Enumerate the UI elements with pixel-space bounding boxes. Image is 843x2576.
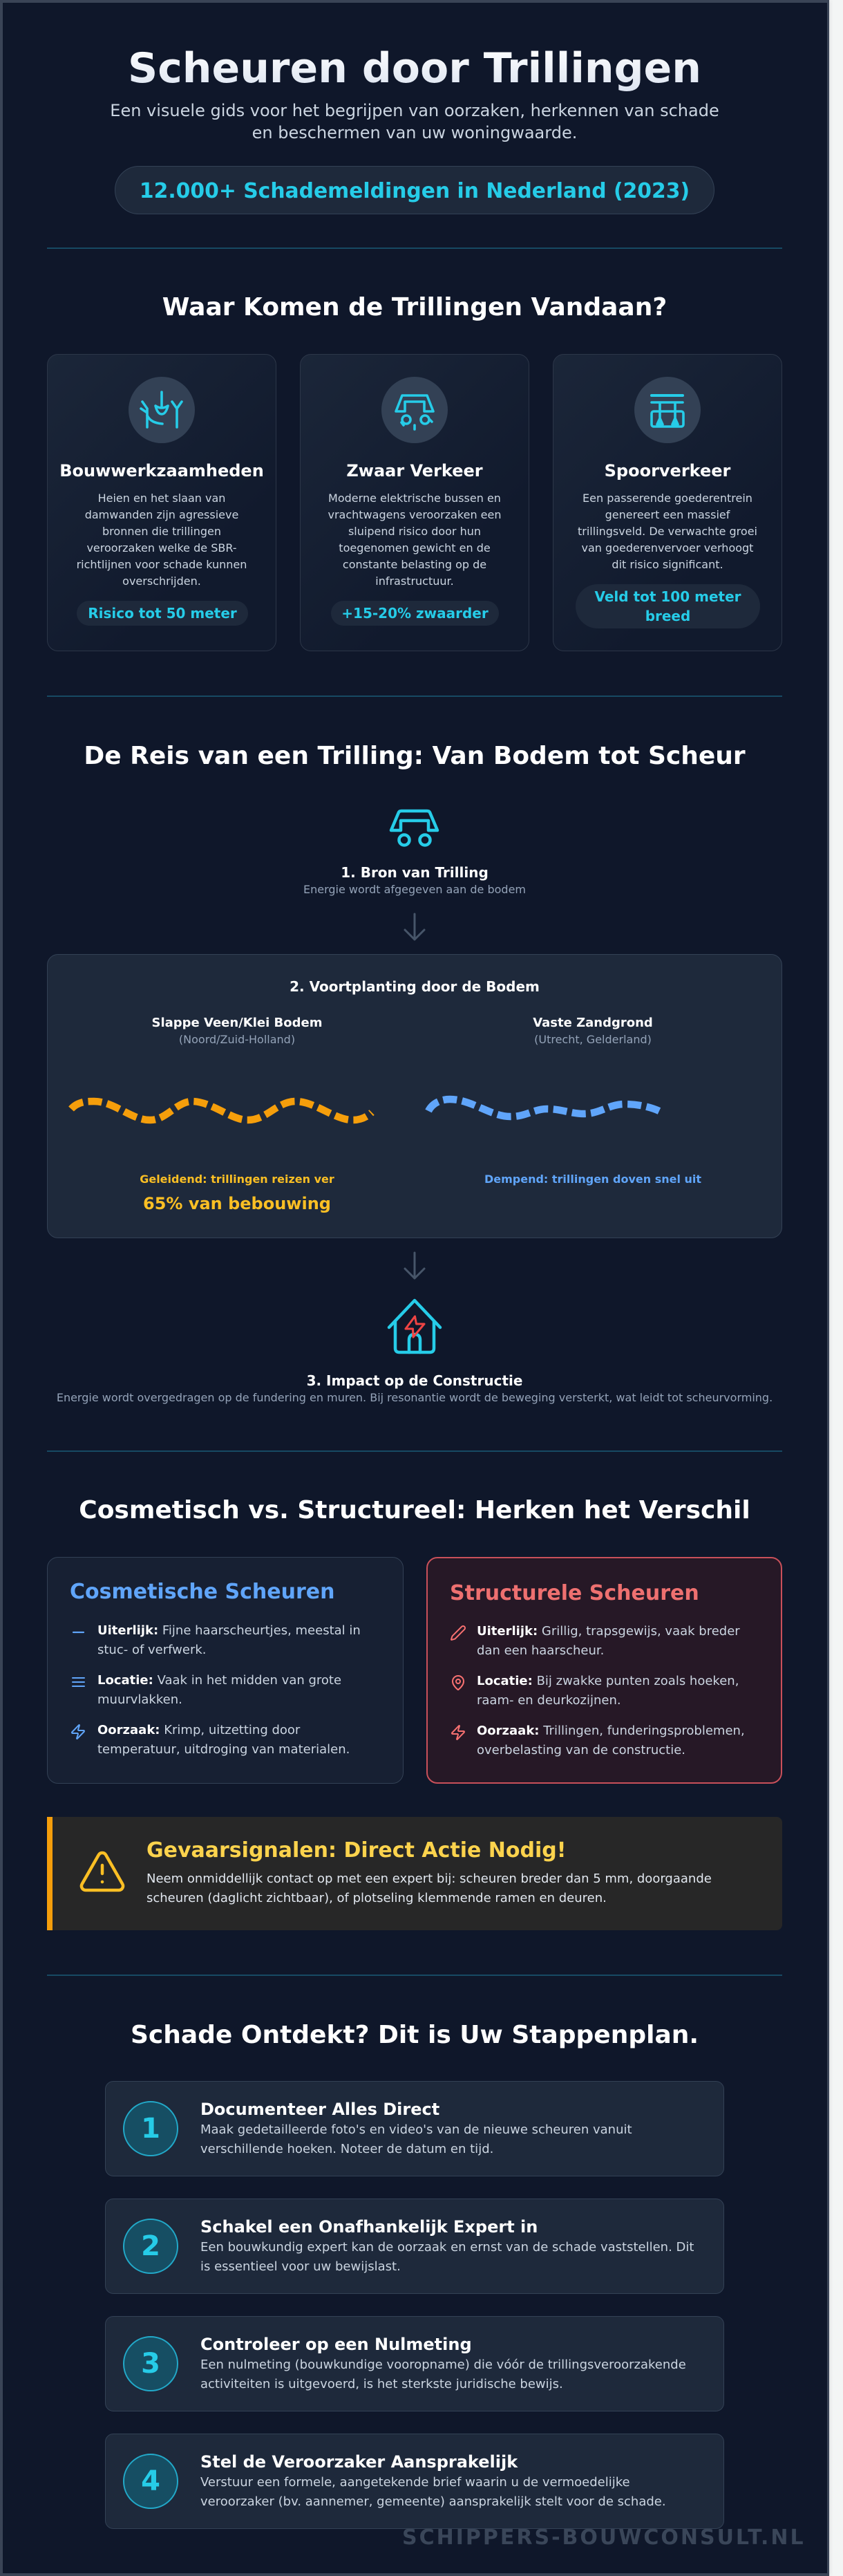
card text: veroorzaken welke de SBR- xyxy=(86,541,237,554)
step title: Schakel een Onafhankelijk Expert in xyxy=(200,2217,538,2237)
icon: warning triangle xyxy=(80,1851,124,1892)
card text: Moderne elektrische bussen en xyxy=(328,492,501,505)
item: appearance: Uiterlijk: Fijne haarscheurtjes, meestal in xyxy=(97,1623,361,1638)
subtitle: Een visuele gids voor het begrijpen van oorzaken, herkennen van schade xyxy=(110,101,719,120)
item: appearance: stuc- of verfwerk. xyxy=(97,1643,207,1657)
step title: Stel de Veroorzaker Aansprakelijk xyxy=(200,2452,518,2472)
step text: Een bouwkundig expert kan de oorzaak en ernst van de schade vaststellen. Dit xyxy=(200,2240,694,2255)
card text: damwanden zijn agressieve xyxy=(85,508,238,521)
panel heading: Structurele Scheuren xyxy=(450,1581,699,1605)
soil 2 name: Vaste Zandgrond xyxy=(533,1016,653,1030)
step text: verschillende hoeken. Noteer de datum en tijd. xyxy=(200,2142,493,2156)
badge xyxy=(331,601,499,626)
icon: truck source xyxy=(390,809,439,847)
step 1 text: Energie wordt afgegeven aan de bodem xyxy=(303,883,526,896)
icon: truck xyxy=(381,377,448,443)
card text: genereert een massief xyxy=(605,508,730,521)
heading: action plan: Schade Ontdekt? Dit is Uw Stappenplan. xyxy=(131,2021,699,2049)
step text: veroorzaker (bv. aannemer, gemeente) aansprakelijk stelt voor de schade. xyxy=(200,2494,666,2509)
badge xyxy=(77,601,248,626)
item: appearance xyxy=(97,1623,361,1657)
card text: infrastructuur. xyxy=(375,575,454,588)
panel: spoorverkeer xyxy=(553,354,782,651)
icon: dash xyxy=(72,1632,84,1633)
subtitle: en beschermen van uw woningwaarde. xyxy=(252,123,577,142)
badge: +15-20% zwaarder xyxy=(341,605,489,622)
item: location xyxy=(97,1673,341,1707)
step title: Documenteer Alles Direct xyxy=(200,2100,439,2119)
title: Scheuren door Trillingen xyxy=(128,44,701,93)
panel: propagation xyxy=(47,954,782,1238)
panel: cosmetic xyxy=(47,1557,404,1784)
card text: van goederenvervoer verhoogt xyxy=(582,541,753,554)
badge: Veld tot 100 meter xyxy=(594,588,741,605)
wave chart: soft soil xyxy=(68,1098,375,1124)
item: cause xyxy=(97,1723,350,1757)
item: cause: temperatuur, uitdroging van materialen. xyxy=(97,1742,350,1757)
callout text xyxy=(146,1872,712,1905)
number: 3 xyxy=(141,2348,160,2380)
conductive label: Geleidend: trillingen reizen ver xyxy=(140,1173,334,1186)
number: 4 xyxy=(141,2465,160,2497)
arrow xyxy=(404,913,426,940)
callout text: scheuren (daglicht zichtbaar), of plotseling klemmende ramen en deuren. xyxy=(146,1891,607,1905)
damping label: Dempend: trillingen doven snel uit xyxy=(484,1173,701,1186)
card text: overschrijden. xyxy=(122,575,201,588)
step 1 xyxy=(105,2081,724,2176)
card text: trillingsveld. De verwachte groei xyxy=(578,525,757,538)
icon: train xyxy=(634,377,701,443)
step 3 text: Energie wordt overgedragen op de fundering en muren. Bij resonantie wordt de beweging versterkt, wat leidt tot scheurvorming. xyxy=(57,1391,773,1404)
soil 1 region: (Noord/Zuid-Holland) xyxy=(179,1033,295,1046)
step text xyxy=(200,2475,666,2509)
card text: richtlijnen voor schade kunnen xyxy=(77,558,247,571)
card text: Heien en het slaan van xyxy=(98,492,225,505)
step text xyxy=(200,2358,686,2391)
step text: Maak gedetailleerde foto's en video's van de nieuwe scheuren vanuit xyxy=(200,2122,632,2137)
heading: journey: De Reis van een Trilling: Van Bodem tot Scheur xyxy=(84,742,746,770)
item: cause: overbelasting van de constructie. xyxy=(477,1743,685,1757)
card text xyxy=(578,492,757,571)
soil 2 region: (Utrecht, Gelderland) xyxy=(534,1033,652,1046)
heading: comparison: Cosmetisch vs. Structureel: Herken het Verschil xyxy=(79,1496,750,1524)
badge: breed xyxy=(645,608,690,624)
item: location: Locatie: Bij zwakke punten zoals hoeken, xyxy=(477,1674,739,1688)
wave chart: firm soil xyxy=(425,1095,661,1120)
icon: pile driver xyxy=(129,377,195,443)
card title: Bouwwerkzaamheden xyxy=(59,461,264,480)
icon: house with bolt xyxy=(387,1298,442,1354)
card text: bronnen die trillingen xyxy=(102,525,221,538)
item: location: Locatie: Vaak in het midden van grote xyxy=(97,1673,341,1688)
item: appearance xyxy=(477,1624,740,1658)
item: appearance: dan een haarscheur. xyxy=(477,1643,604,1658)
card text: vrachtwagens veroorzaken een xyxy=(328,508,502,521)
item: location: muurvlakken. xyxy=(97,1692,182,1707)
card text: Een passerende goederentrein xyxy=(582,492,752,505)
card text: sluipend risico door hun xyxy=(348,525,481,538)
callout text: Neem onmiddellijk contact op met een expert bij: scheuren breder dan 5 mm, doorgaande xyxy=(146,1872,712,1886)
icon: lines xyxy=(72,1677,85,1687)
step 2 xyxy=(105,2199,724,2294)
step text: is essentieel voor uw bewijslast. xyxy=(200,2259,401,2274)
heading: sources: Waar Komen de Trillingen Vandaan? xyxy=(162,293,667,321)
panel title: 2. Voortplanting door de Bodem xyxy=(290,978,540,995)
item: location: raam- en deurkozijnen. xyxy=(477,1693,621,1708)
step 4 xyxy=(105,2434,724,2529)
card title: Zwaar Verkeer xyxy=(346,461,483,480)
subtitle xyxy=(110,101,719,142)
icon: bolt xyxy=(70,1724,85,1739)
step text xyxy=(200,2122,632,2156)
badge xyxy=(576,584,760,628)
panel heading: Cosmetische Scheuren xyxy=(70,1580,334,1604)
stat pill: 12.000+ Schademeldingen in Nederland (2023) xyxy=(140,179,690,203)
badge: Risico tot 50 meter xyxy=(88,605,237,622)
step 3 title: 3. Impact op de Constructie xyxy=(307,1372,522,1389)
icon: pin xyxy=(452,1675,464,1690)
step 3 xyxy=(105,2316,724,2411)
card text: constante belasting op de xyxy=(343,558,486,571)
step text: activiteiten is uitgevoerd, is het sterkste juridische bewijs. xyxy=(200,2377,563,2391)
card text: dit risico significant. xyxy=(612,558,723,571)
number: 2 xyxy=(141,2230,160,2262)
step text xyxy=(200,2240,694,2274)
number xyxy=(123,2336,178,2391)
item: cause xyxy=(477,1724,745,1757)
number xyxy=(123,2101,178,2156)
step 1 title: 1. Bron van Trilling xyxy=(341,864,489,881)
callout heading: Gevaarsignalen: Direct Actie Nodig! xyxy=(146,1838,566,1863)
arrow xyxy=(404,1251,426,1279)
callout: danger signals xyxy=(47,1817,782,1930)
soil 1 name: Slappe Veen/Klei Bodem xyxy=(152,1016,322,1030)
step title: Controleer op een Nulmeting xyxy=(200,2335,472,2354)
title xyxy=(0,44,829,93)
number xyxy=(123,2219,178,2274)
step text: Verstuur een formele, aangetekende brief waarin u de vermoedelijke xyxy=(200,2475,630,2490)
number xyxy=(123,2454,178,2509)
step text: Een nulmeting (bouwkundige vooropname) die vóór de trillingsveroorzakende xyxy=(200,2358,686,2372)
stat pill xyxy=(115,166,714,214)
stat 65%: 65% van bebouwing xyxy=(143,1194,331,1213)
card text: toegenomen gewicht en de xyxy=(339,541,491,554)
watermark: SCHIPPERS-BOUWCONSULT.NL xyxy=(402,2526,806,2550)
card text xyxy=(328,492,502,588)
item: cause: Oorzaak: Trillingen, funderingsproblemen, xyxy=(477,1724,745,1738)
item: appearance: Uiterlijk: Grillig, trapsgewijs, vaak breder xyxy=(477,1624,740,1639)
item: location xyxy=(477,1674,739,1708)
card text xyxy=(77,492,247,588)
panel: bouwwerkzaamheden xyxy=(47,354,276,651)
panel: zwaar verkeer xyxy=(300,354,529,651)
number: 1 xyxy=(141,2113,160,2145)
card title: Spoorverkeer xyxy=(605,461,730,480)
panel: structural xyxy=(426,1557,782,1784)
item: cause: Oorzaak: Krimp, uitzetting door xyxy=(97,1723,300,1737)
icon: pencil xyxy=(451,1625,466,1641)
icon: bolt xyxy=(451,1725,465,1740)
